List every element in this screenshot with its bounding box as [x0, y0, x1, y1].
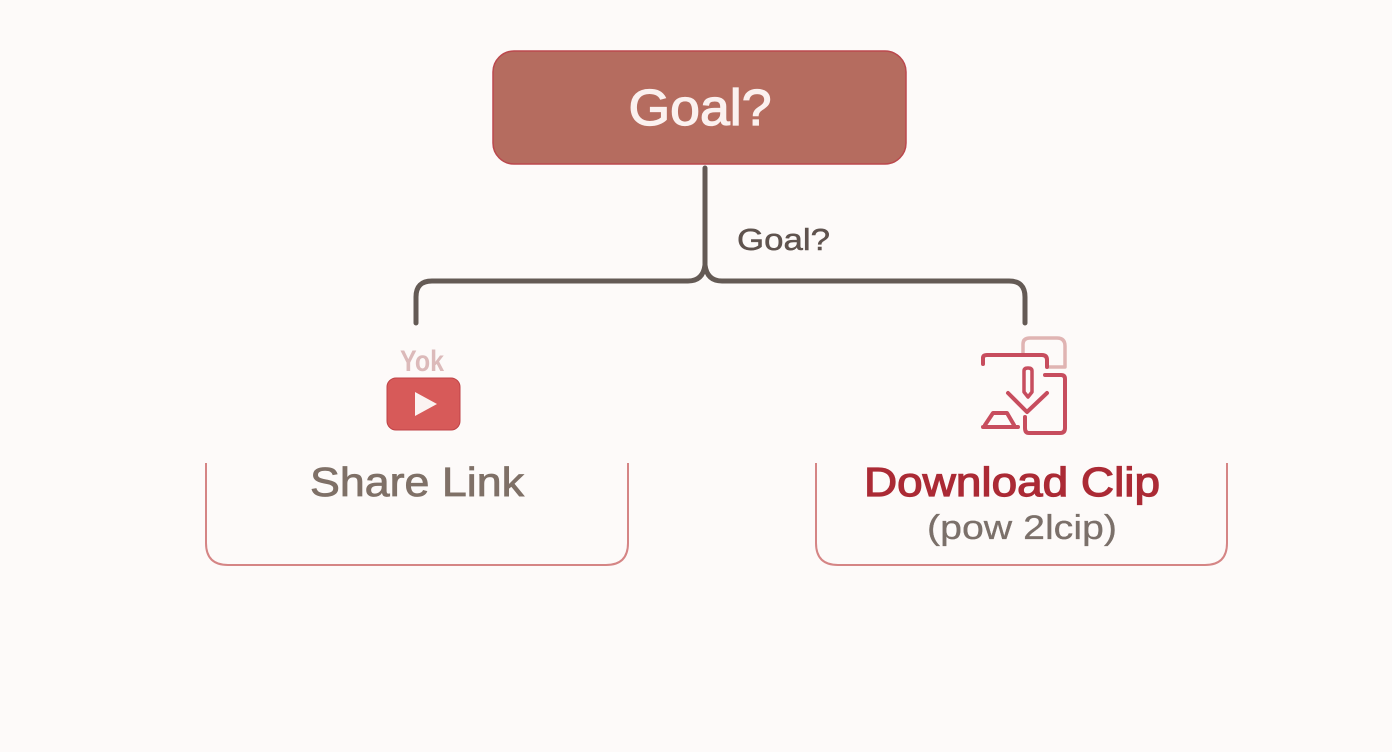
branching connector	[416, 168, 1025, 323]
icon: video play: Yok	[400, 345, 444, 378]
connector label: Goal?	[737, 222, 830, 257]
goal heading box: Goal?	[628, 79, 772, 136]
icon: download clip	[983, 338, 1065, 433]
panel: share link	[206, 459, 628, 565]
download clip sublabel: (pow 2lcip)	[927, 509, 1117, 547]
panel: download clip	[816, 459, 1227, 565]
share link label: Share Link	[310, 459, 525, 505]
icon: video play	[387, 345, 460, 430]
goal heading box	[493, 51, 906, 164]
download clip label: Download Clip	[864, 459, 1160, 505]
